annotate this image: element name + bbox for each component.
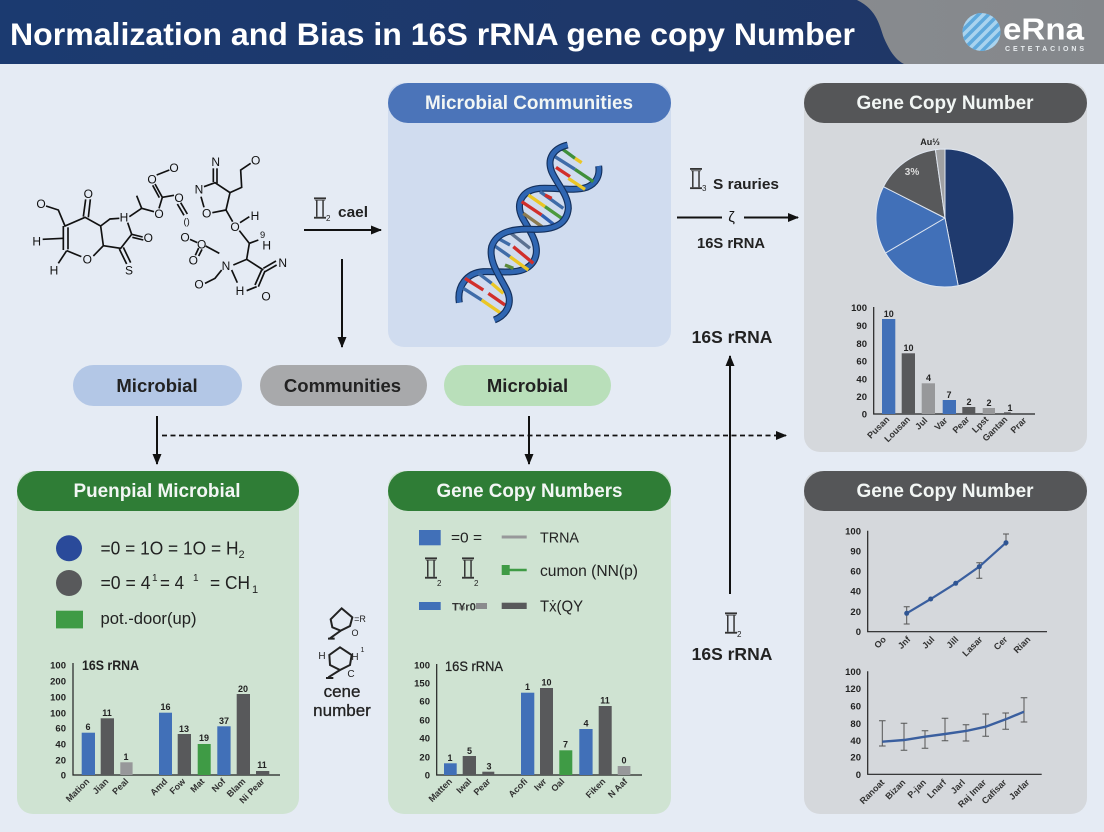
chemical structure: large molecule: O bbox=[202, 206, 211, 220]
panel: gene copy numbers bbox=[388, 471, 671, 814]
bar chart: 16S rRNA: 40 bbox=[55, 740, 66, 750]
bar chart: 16S rRNA: 20 bbox=[419, 752, 430, 764]
arrow with label: cael: 2 bbox=[326, 214, 331, 223]
line chart: upper: Jul bbox=[920, 634, 936, 651]
bar chart bbox=[851, 303, 1035, 444]
bar chart: 16S rRNA: 1 bbox=[447, 753, 453, 763]
bar chart: 16S rRNA: 200 bbox=[50, 676, 66, 688]
chemical structure: large molecule: 9 bbox=[260, 230, 265, 240]
bar chart: 16S rRNA: 0 bbox=[621, 756, 627, 766]
small molecules with label: cene number: H bbox=[351, 652, 359, 663]
bar chart: 16S rRNA: 20 bbox=[238, 684, 248, 694]
bar chart: 16S rRNA: 100 bbox=[414, 660, 430, 672]
chemical structure: large molecule: O bbox=[194, 277, 204, 291]
line chart: lower bbox=[845, 667, 1042, 810]
line chart: lower: Ranoat bbox=[858, 777, 886, 806]
chemical structure: large molecule: N bbox=[211, 155, 220, 169]
bar chart: 16S rRNA: 11 bbox=[102, 708, 112, 718]
line chart: upper: Oo bbox=[872, 634, 888, 650]
bar chart: 16S rRNA: 60 bbox=[419, 716, 430, 726]
panel: microbial communities bbox=[388, 83, 671, 347]
label: 16S rRNA below up arrow: 2 bbox=[737, 630, 742, 639]
chemical structure: large molecule: H bbox=[120, 211, 128, 225]
chemical structure: large molecule: O bbox=[189, 253, 198, 267]
chemical structure: large molecule: H bbox=[251, 209, 259, 223]
chemical structure: large molecule: O bbox=[197, 237, 206, 251]
line chart: lower: 0 bbox=[856, 770, 861, 781]
panel: gene copy number with pie and bar chart bbox=[804, 83, 1087, 452]
legend: =0 = bbox=[451, 530, 482, 546]
chemical structure: large molecule: O bbox=[83, 253, 92, 267]
bar chart: 16S rRNA: 100 bbox=[50, 660, 66, 672]
line chart: lower: 80 bbox=[850, 719, 861, 730]
bar chart: 16S rRNA bbox=[414, 658, 642, 804]
bar chart: 16S rRNA: Acofi bbox=[506, 776, 529, 799]
line chart: lower: P-jan bbox=[905, 777, 928, 800]
bar chart: Lousan bbox=[882, 414, 912, 444]
legend: 2 bbox=[437, 579, 442, 588]
bar chart: 16S rRNA: 7 bbox=[563, 740, 568, 750]
bar chart: 16S rRNA: 13 bbox=[179, 724, 189, 734]
arrow with labels: S rauries to 16S rRNA: 16S rRNA bbox=[697, 235, 765, 252]
bar chart: 16S rRNA: 20 bbox=[55, 756, 66, 766]
arrow: microbial down to center panel bbox=[528, 416, 530, 464]
small molecules with label: cene number: C bbox=[347, 669, 355, 680]
chemical structure: large molecule: () bbox=[184, 217, 190, 227]
pie chart: 3% bbox=[905, 167, 919, 178]
small molecules with label: cene number: O bbox=[351, 628, 359, 638]
line chart: lower: 20 bbox=[850, 752, 861, 764]
arrow with label: cael bbox=[304, 197, 381, 230]
bar chart: 20 bbox=[856, 392, 867, 403]
bar chart: 0 bbox=[862, 410, 867, 420]
bar chart: 16S rRNA: Fiken bbox=[584, 776, 607, 800]
bar chart: 40 bbox=[856, 374, 867, 386]
bar chart: Var bbox=[932, 415, 950, 432]
logo: eRna: CETETACIONS bbox=[1005, 46, 1084, 53]
chemical structure: large molecule: H bbox=[236, 284, 244, 298]
pill: communities: Communities bbox=[284, 375, 401, 396]
bar chart: Jul bbox=[913, 415, 929, 432]
small molecules with label: cene number: number bbox=[313, 701, 371, 720]
bar chart: 16S rRNA: Matten bbox=[427, 776, 454, 804]
legend: 2 bbox=[238, 549, 245, 561]
bar chart: 16S rRNA: 16 bbox=[160, 702, 171, 712]
label: 16S rRNA above up arrow: 16S rRNA bbox=[692, 327, 773, 347]
bar chart: 100 bbox=[851, 303, 867, 314]
chemical structure: large molecule: O bbox=[174, 191, 184, 205]
bar chart: Pear bbox=[951, 414, 972, 435]
bar chart: 16S rRNA: 60 bbox=[55, 724, 66, 734]
bar chart: 10 bbox=[903, 343, 914, 353]
legend: 1 bbox=[152, 573, 158, 584]
bar chart: 16S rRNA: 60 bbox=[419, 696, 430, 708]
legend: Tẋ(QY bbox=[540, 599, 583, 616]
line chart: lower: Jarlar bbox=[1007, 777, 1032, 802]
bar chart: 16S rRNA: Iwr bbox=[532, 776, 549, 793]
bar chart: 16S rRNA: Mation bbox=[64, 776, 91, 804]
bar chart: 16S rRNA: 1 bbox=[525, 682, 530, 692]
panel: puenpial microbial bbox=[17, 471, 299, 814]
line chart: upper: Lasar bbox=[960, 634, 985, 658]
pie chart: Au⅓ bbox=[920, 137, 940, 147]
line chart: upper: 100 bbox=[845, 526, 861, 538]
logo: eRna bbox=[962, 13, 1084, 51]
bar chart: Lpst bbox=[970, 414, 990, 435]
arrow: down to communities bbox=[341, 259, 343, 347]
legend: TRNA bbox=[540, 530, 579, 547]
bar chart: 90 bbox=[856, 321, 867, 332]
bar chart: 16S rRNA: 100 bbox=[50, 708, 66, 720]
header banner bbox=[0, 0, 1104, 64]
legend: T¥r0 bbox=[452, 602, 476, 614]
chemical structure: large molecule: O bbox=[251, 153, 260, 167]
arrow with labels: S rauries to 16S rRNA: ζ bbox=[728, 209, 735, 226]
pill: microbial green bbox=[444, 365, 611, 406]
bar chart: 16S rRNA: Iwal bbox=[454, 776, 473, 795]
bar chart: 16S rRNA: 19 bbox=[199, 733, 209, 743]
pill: microbial green: Microbial bbox=[487, 375, 568, 396]
bar chart: 1 bbox=[1007, 403, 1013, 413]
line chart: lower: 100 bbox=[845, 667, 861, 678]
bar chart: 16S rRNA: Fow bbox=[168, 776, 188, 796]
heading: gene copy number: Gene Copy Number bbox=[856, 480, 1034, 502]
bar chart: 16S rRNA: 0 bbox=[425, 770, 430, 782]
arrow: microbial down to left panel bbox=[156, 416, 158, 464]
bar chart: 16S rRNA: 11 bbox=[600, 696, 610, 706]
chemical structure: large molecule: O bbox=[147, 172, 157, 186]
line chart: upper bbox=[845, 526, 1047, 658]
chemical structure: large molecule bbox=[32, 153, 287, 303]
bar chart: 80 bbox=[856, 339, 867, 350]
bar chart: 16S rRNA: Ni Pear bbox=[237, 776, 267, 805]
chemical structure: large molecule: N bbox=[278, 256, 287, 270]
small molecules with label: cene number: =R bbox=[354, 614, 366, 624]
bar chart: 16S rRNA: Pear bbox=[472, 776, 493, 797]
line chart: upper: 60 bbox=[850, 566, 861, 578]
arrow: up to 16S rRNA bbox=[729, 356, 731, 594]
small molecules with label: cene number: cene bbox=[324, 682, 360, 701]
bar chart: 16S rRNA: 40 bbox=[419, 734, 430, 744]
bar chart: 2 bbox=[966, 397, 972, 407]
bar chart: 16S rRNA: 37 bbox=[219, 716, 229, 726]
line chart: upper: 40 bbox=[850, 586, 861, 598]
chemical structure: large molecule: O bbox=[144, 231, 153, 245]
legend bbox=[56, 535, 258, 628]
bar chart: 16S rRNA bbox=[50, 657, 280, 805]
legend: =0 = 4 bbox=[100, 573, 150, 593]
bar chart: 10 bbox=[884, 309, 894, 319]
bar chart: 16S rRNA: 4 bbox=[583, 718, 589, 728]
chemical structure: large molecule: O bbox=[154, 207, 164, 221]
line chart: lower: Bizan bbox=[883, 777, 907, 801]
legend: pot.-door(up) bbox=[100, 609, 196, 628]
bar chart: 16S rRNA: Nof bbox=[210, 776, 228, 794]
chemical structure: large molecule: S bbox=[125, 264, 133, 278]
bar chart: 4 bbox=[926, 373, 931, 383]
dashed arrow to right panel bbox=[162, 434, 786, 436]
line chart: lower: Raj Imar bbox=[956, 777, 988, 810]
legend: cumon (NN(p) bbox=[540, 563, 638, 580]
pill: communities bbox=[260, 365, 427, 406]
arrow with label: cael: cael bbox=[338, 204, 368, 221]
label: 16S rRNA below up arrow bbox=[692, 612, 773, 664]
line chart: upper: 20 bbox=[850, 607, 861, 618]
line chart: upper: Jill bbox=[944, 634, 960, 650]
bar chart: 16S rRNA: 100 bbox=[50, 692, 66, 704]
heading: gene copy numbers: Gene Copy Numbers bbox=[436, 480, 623, 502]
bar chart: 16S rRNA: 5 bbox=[467, 746, 472, 756]
bar chart: 16S rRNA: Mat bbox=[188, 776, 206, 794]
bar chart: 16S rRNA: 16S rRNA bbox=[82, 657, 139, 673]
legend: = 4 bbox=[160, 573, 184, 593]
line chart: upper: 90 bbox=[850, 546, 861, 558]
chemical structure: large molecule: O bbox=[230, 220, 240, 234]
bar chart: Gantan bbox=[980, 414, 1009, 443]
bar chart: 16S rRNA: Jian bbox=[91, 776, 110, 796]
line chart: upper: Cer bbox=[992, 634, 1010, 652]
line chart: lower: Jarl bbox=[949, 777, 967, 796]
bar chart: 60 bbox=[856, 356, 867, 368]
bar chart: 16S rRNA: N Aaf bbox=[606, 776, 630, 800]
title: Normalization and Bias in 16S rRNA gene copy Number bbox=[10, 16, 855, 52]
chemical structure: large molecule: O bbox=[36, 197, 46, 211]
legend: =0 = 1O = 1O = H bbox=[100, 538, 238, 558]
chemical structure: large molecule: N bbox=[222, 259, 230, 273]
chemical structure: large molecule: H bbox=[32, 234, 41, 248]
pill: microbial: Microbial bbox=[116, 375, 198, 396]
legend: = CH bbox=[210, 573, 250, 593]
bar chart: 16S rRNA: 3 bbox=[486, 762, 492, 772]
chemical structure: large molecule: O bbox=[169, 161, 179, 175]
logo: eRna: eRna bbox=[1003, 12, 1085, 46]
bar chart: 16S rRNA: Amd bbox=[148, 776, 169, 798]
bar chart: Prar bbox=[1009, 415, 1029, 435]
small molecules with label: cene number: 1 bbox=[361, 647, 365, 654]
line chart: lower: 60 bbox=[850, 702, 861, 712]
arrow with labels: S rauries to 16S rRNA bbox=[677, 168, 798, 252]
heading: microbial communities: Microbial Communities bbox=[425, 92, 633, 114]
bar chart: 16S rRNA: Blam bbox=[225, 776, 247, 799]
line chart: lower: Lnarf bbox=[925, 777, 949, 800]
bar chart: 7 bbox=[946, 390, 952, 400]
line chart: lower: 120 bbox=[845, 684, 861, 695]
chemical structure: large molecule: O bbox=[84, 187, 93, 201]
small molecules with label: cene number: H bbox=[318, 651, 326, 662]
arrow with labels: S rauries to 16S rRNA: 3 bbox=[702, 184, 707, 193]
line chart: lower: Cafisar bbox=[980, 777, 1009, 806]
chemical structure: large molecule: H bbox=[50, 264, 58, 278]
bar chart: 16S rRNA: 1 bbox=[123, 752, 129, 762]
icon: DNA double helix bbox=[459, 145, 599, 320]
bar chart: 16S rRNA: 6 bbox=[85, 722, 91, 732]
label: 16S rRNA below up arrow: 16S rRNA bbox=[692, 644, 773, 664]
legend: 2 bbox=[474, 579, 479, 588]
chemical structure: large molecule: O bbox=[180, 231, 190, 245]
line chart: upper: Rian bbox=[1012, 634, 1032, 655]
panel: gene copy number line charts bbox=[804, 471, 1087, 814]
bar chart: 2 bbox=[986, 398, 992, 408]
bar chart: 16S rRNA: 16S rRNA bbox=[445, 658, 504, 674]
heading: puenpial microbial: Puenpial Microbial bbox=[74, 480, 240, 502]
bar chart: 16S rRNA: Oal bbox=[549, 776, 566, 794]
line chart: upper: 0 bbox=[856, 627, 861, 638]
bar chart: 16S rRNA: Peal bbox=[110, 776, 130, 797]
chemical structure: large molecule: O bbox=[261, 289, 271, 303]
line chart: upper: Jnf bbox=[896, 634, 913, 651]
bar chart: 16S rRNA: 10 bbox=[541, 678, 552, 688]
heading: gene copy number: Gene Copy Number bbox=[856, 92, 1034, 114]
legend bbox=[419, 530, 638, 616]
legend: 1 bbox=[252, 584, 258, 596]
arrow with labels: S rauries to 16S rRNA: S rauries bbox=[713, 176, 779, 193]
chemical structure: large molecule: H bbox=[262, 238, 271, 252]
bar chart: Pusan bbox=[865, 414, 891, 441]
line chart: lower: 40 bbox=[850, 736, 861, 747]
pie chart bbox=[876, 137, 1014, 287]
bar chart: 16S rRNA: 0 bbox=[61, 770, 66, 782]
pill: microbial bbox=[73, 365, 242, 406]
legend: 1 bbox=[193, 573, 199, 584]
bar chart: 16S rRNA: 150 bbox=[414, 678, 430, 690]
small molecules with label: cene number bbox=[313, 608, 371, 720]
chemical structure: large molecule: N bbox=[195, 183, 203, 197]
bar chart: 16S rRNA: 11 bbox=[257, 760, 267, 770]
